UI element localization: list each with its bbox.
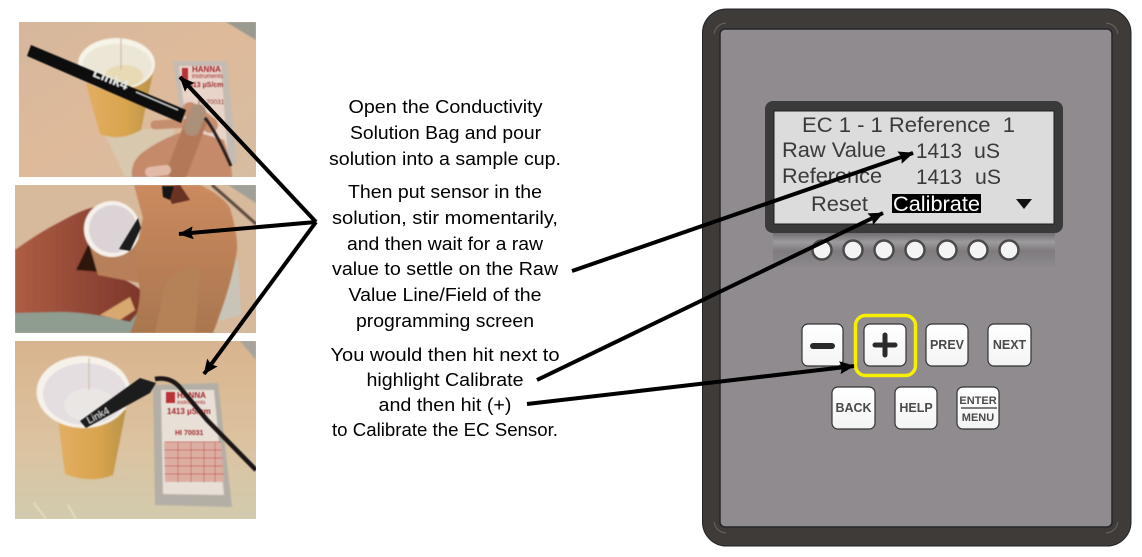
photo: pouring solution, pen over cup and solution bag [19, 22, 256, 177]
solution bag [153, 383, 232, 507]
instructions: calibrate: You would then hit next to [330, 345, 560, 365]
arrow: to hand in middle photo [179, 222, 316, 234]
photo: sensor resting in cup next to solution bag [15, 341, 256, 519]
paper cup [78, 38, 155, 137]
button: help [895, 387, 937, 429]
button: enter menu: ENTER [959, 395, 997, 407]
button: help: HELP [899, 401, 933, 415]
indicator lights [812, 240, 1018, 260]
instructions: open the bag: Open the Conductivity [348, 97, 542, 117]
button: back: BACK [835, 401, 872, 415]
instructions: put sensor in solution: and then wait for a raw [347, 234, 544, 254]
bag label text: 1413 µS/cm [167, 407, 211, 416]
LCD title line: EC 1 - 1 Reference 1 [802, 114, 1015, 137]
instructions: open the bag [329, 97, 561, 169]
reset option: Reset [811, 193, 868, 216]
probe [80, 378, 156, 428]
paper cup [82, 200, 141, 284]
reference line: uS [975, 166, 1001, 189]
left hand [15, 207, 148, 322]
device casing [702, 9, 1131, 546]
bag label text: HANNA [177, 391, 206, 400]
instructions: put sensor in solution: value to settle on the Raw [332, 259, 559, 279]
raw value line: uS [974, 140, 1000, 163]
arrow: to raw value reading [572, 153, 913, 271]
arrow: to solution bag in top photo [180, 77, 316, 222]
instructions: open the bag: Solution Bag and pour [350, 123, 541, 143]
instructions: put sensor in solution [332, 182, 559, 331]
hand holding pen [132, 110, 232, 177]
bag brand text: HANNA [192, 65, 221, 74]
button: prev [926, 324, 968, 366]
instructions: put sensor in solution: Then put sensor in the [348, 182, 542, 202]
button: next [988, 324, 1031, 366]
button: back [832, 387, 875, 429]
right hand [130, 185, 237, 333]
plus button highlight [856, 316, 916, 376]
cable [155, 378, 256, 470]
sensor tip in cup [119, 185, 190, 251]
raw value line: Raw Value [782, 139, 886, 162]
solution bag [173, 61, 237, 163]
button: next: NEXT [993, 338, 1027, 352]
button: prev: PREV [930, 338, 965, 352]
display reflection [773, 233, 1055, 269]
sensor pen [27, 45, 186, 123]
reference line: 1413 [916, 166, 962, 189]
photo: pouring solution, pen over cup and solution bag: instruments [192, 74, 223, 80]
instructions: put sensor in solution: programming screen [356, 311, 534, 331]
instructions: calibrate [330, 345, 560, 440]
arrow: to plus button [527, 366, 854, 404]
instructions: calibrate: highlight Calibrate [366, 370, 524, 390]
arrow: to calibrate option [537, 213, 883, 380]
bag label text: instruments [177, 400, 206, 406]
instructions: open the bag: solution into a sample cup. [329, 149, 561, 169]
reference line: Reference [782, 165, 882, 188]
arrow: to cup and bag in bottom photo [204, 222, 316, 374]
device face panel [720, 29, 1112, 527]
photo: pouring solution, pen over cup and solution bag: 413 µS/cm [189, 82, 223, 89]
reference line [782, 165, 1001, 189]
pen label: Link4 [91, 65, 132, 93]
instructions: calibrate: and then hit (+) [378, 395, 512, 415]
calibrate option highlighted: Calibrate [893, 193, 980, 216]
instructions: put sensor in solution: Value Line/Field of the [348, 285, 542, 305]
button: plus [864, 324, 906, 366]
photo: pouring solution, pen over cup and solution bag: HI 70031 [198, 99, 225, 106]
controller device [702, 9, 1131, 546]
button: enter menu [957, 387, 999, 429]
button: minus [802, 324, 843, 366]
instructions: put sensor in solution: solution, stir momentarily, [332, 208, 558, 228]
paper cup [36, 356, 130, 479]
raw value line [782, 139, 1000, 163]
bag label text: HI 70031 [175, 430, 204, 437]
bag label text [166, 391, 211, 437]
raw value line: 1413 [916, 140, 962, 163]
probe label: Link4 [85, 406, 112, 427]
instructions: calibrate: to Calibrate the EC Sensor. [332, 420, 558, 440]
button: enter menu: MENU [962, 412, 994, 424]
scroll down indicator [1016, 199, 1032, 209]
LCD display [765, 101, 1063, 233]
photo: sensor in cup held by hands [15, 185, 256, 333]
